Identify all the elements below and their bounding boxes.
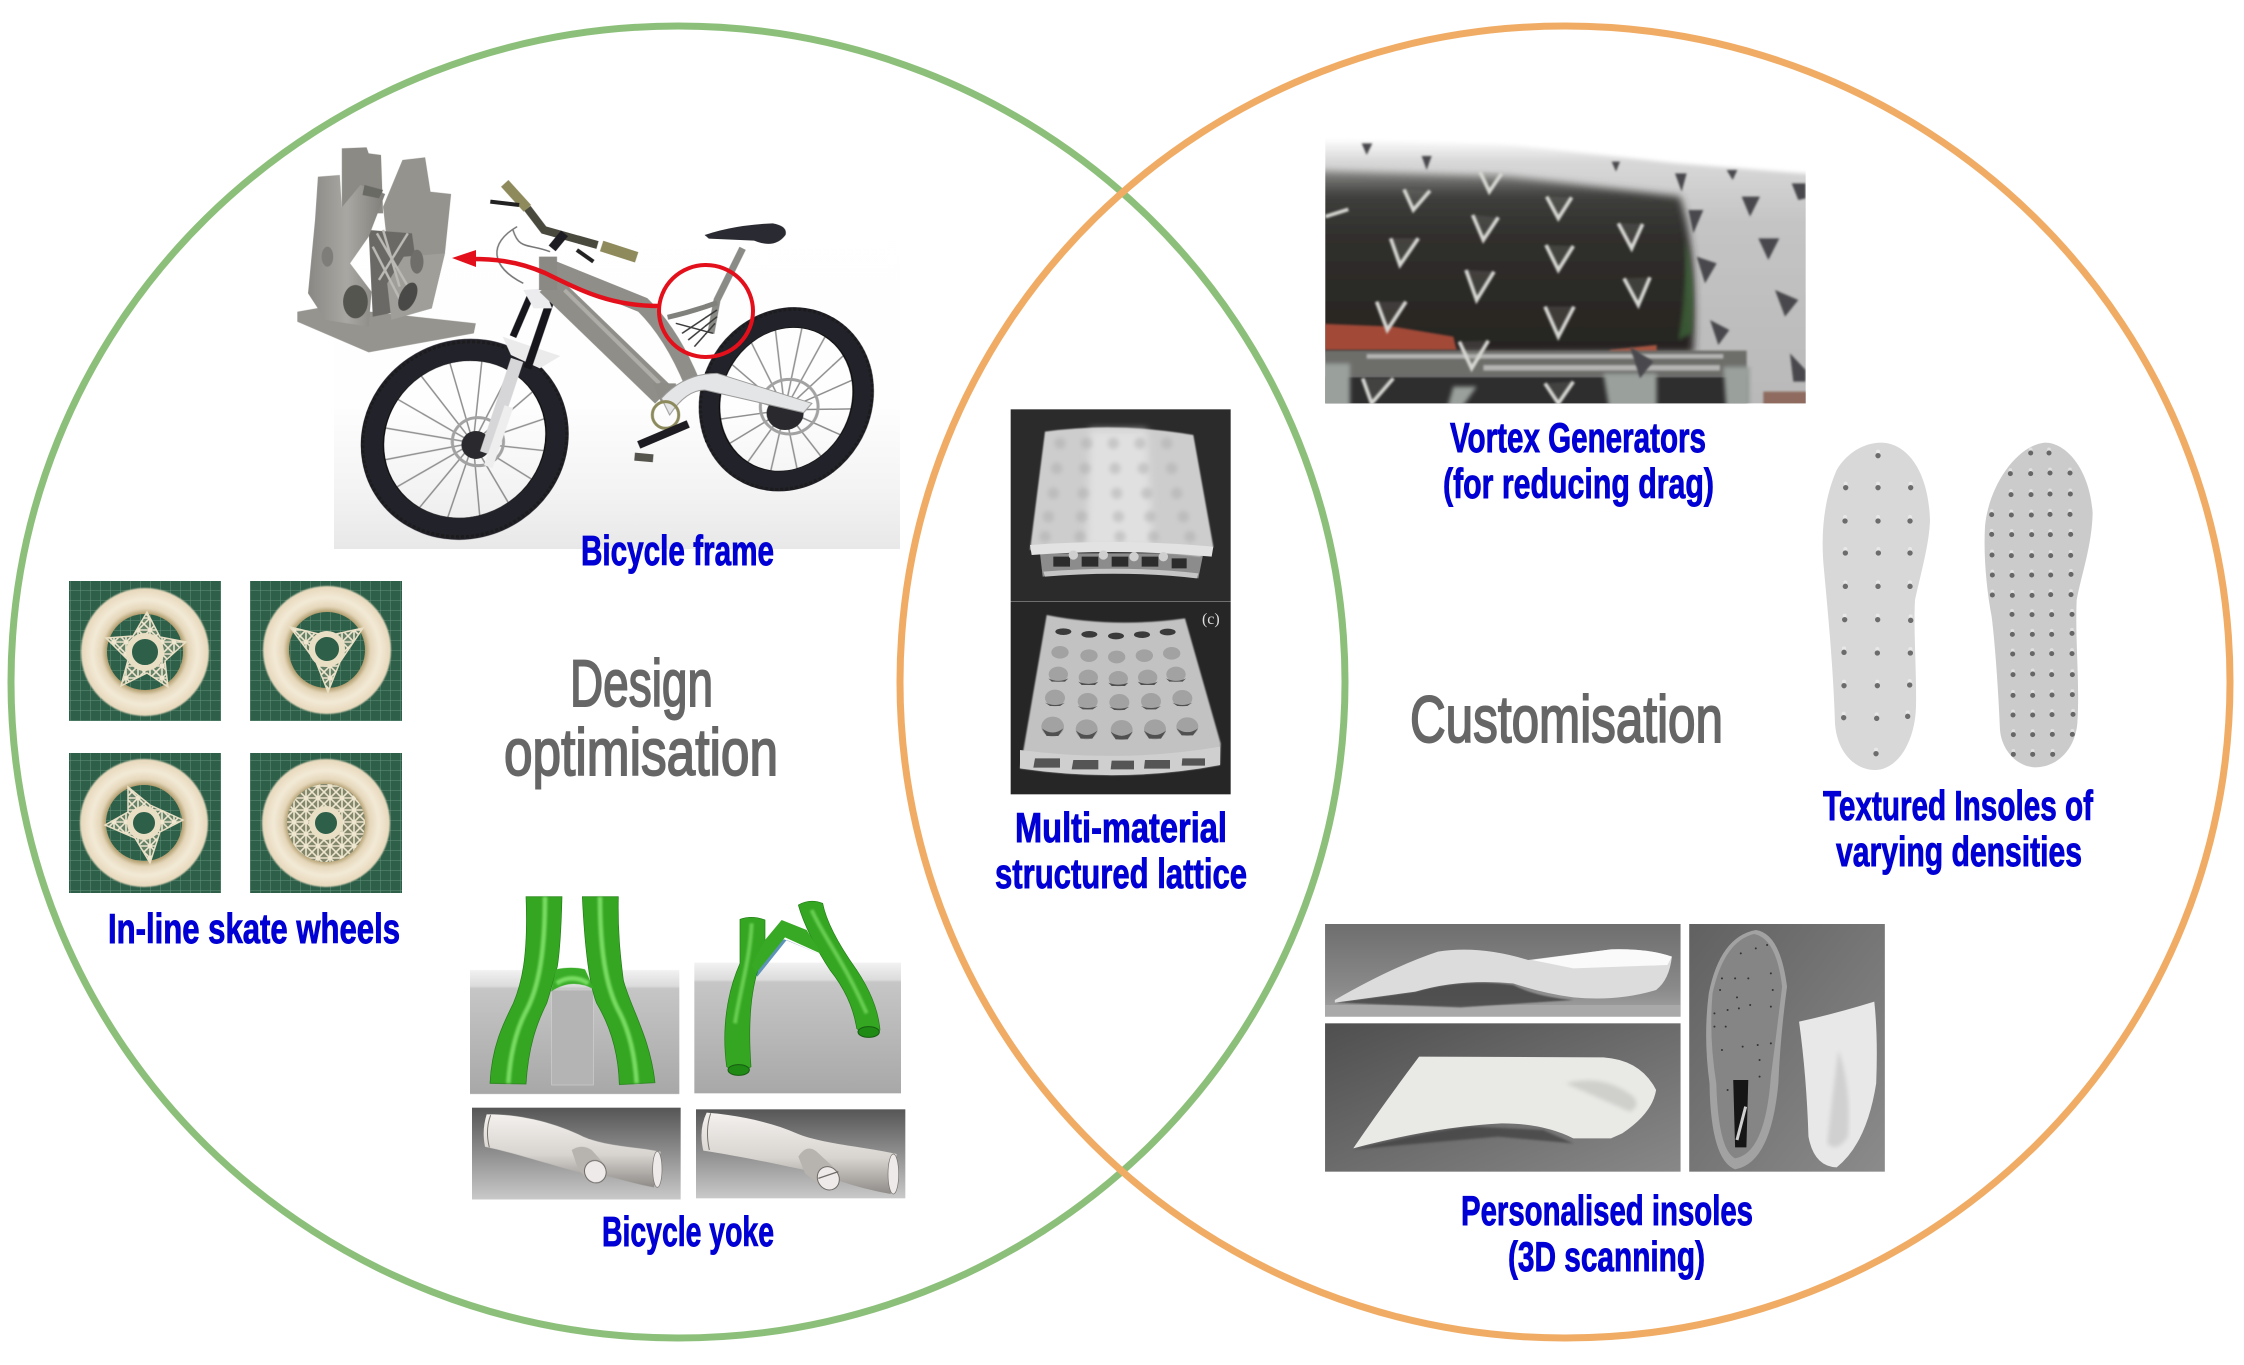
frame: [552, 268, 692, 383]
plate surface texture: [1045, 443, 1190, 537]
front wheel: [344, 329, 586, 550]
panel: bicycle yoke renders: [470, 897, 905, 1199]
panel: in-line skate wheels: [69, 581, 402, 893]
photo background: [334, 170, 900, 549]
label: multi-material structured lattice: [995, 804, 1247, 897]
lattice photo: underside: (c): [1202, 611, 1220, 628]
right circle: customisation: [900, 26, 2230, 1338]
top view photo: [1689, 924, 1885, 1172]
saddle: [705, 223, 786, 244]
swingarm: [661, 373, 812, 415]
label: textured insoles: varying densities: [1836, 828, 2082, 875]
label: bicycle yoke: Bicycle yoke: [602, 1208, 774, 1255]
fork: [486, 360, 517, 453]
label: textured insoles: Textured Insoles of: [1823, 782, 2094, 829]
heading: design optimisation: [504, 646, 778, 789]
heading: design optimisation: optimisation: [504, 715, 778, 789]
dark cylinder: [1297, 170, 1694, 355]
left circle: design optimisation: [11, 26, 1345, 1338]
photo base: [1325, 143, 1806, 404]
label: personalised insoles: Personalised insoles: [1461, 1187, 1753, 1234]
heading: customisation: Customisation: [1410, 682, 1723, 756]
panel: textured insoles: [1823, 443, 2093, 770]
crank and pedal: [652, 402, 679, 428]
3D printed frame part: [297, 147, 476, 352]
dark lower halves of holes: [1042, 678, 1198, 739]
heading: design optimisation: Design: [570, 646, 713, 720]
label: multi-material structured lattice: Multi-material: [1015, 804, 1227, 851]
joint section view 1: [472, 1108, 681, 1199]
wheel 4: full lattice: [250, 753, 402, 893]
joint section view 2: [696, 1109, 905, 1198]
yoke front view: [470, 897, 679, 1094]
side view photo: [1325, 924, 1681, 1017]
label: multi-material structured lattice: structured lattice: [995, 850, 1247, 897]
yoke angled view: [694, 901, 901, 1093]
white V vortex generators: [1325, 172, 1650, 403]
label: vortex generators: (for reducing drag): [1443, 460, 1714, 507]
label: vortex generators: [1443, 414, 1714, 507]
label: personalised insoles: (3D scanning): [1508, 1233, 1705, 1280]
label: vortex generators: Vortex Generators: [1450, 414, 1706, 461]
label: textured insoles: [1823, 782, 2094, 875]
green fringe: [1678, 240, 1693, 340]
red arrow to printed part: [452, 250, 659, 306]
bicycle illustration: [344, 183, 889, 550]
rear wheel: [683, 298, 889, 501]
lattice photo: top view: [1011, 409, 1231, 601]
panel: bicycle frame photo: [297, 147, 900, 550]
label: bicycle frame: Bicycle frame: [581, 527, 774, 574]
angled view photo: [1325, 1023, 1681, 1172]
red and bright bands: [1310, 323, 1457, 350]
label: personalised insoles: [1461, 1187, 1753, 1280]
lattice photo: underside: [1011, 602, 1231, 794]
wheel 1: five spokes: [69, 581, 221, 721]
panel: personalised insole photos: [1325, 924, 1885, 1172]
high density insole: [1985, 443, 2093, 767]
wheel 3: four spokes: [69, 753, 221, 893]
wheel 2: three spokes: [250, 581, 402, 721]
handlebar and grips: [527, 208, 597, 245]
label: in-line skate wheels: In-line skate wheels: [108, 905, 400, 952]
red highlight circle: [659, 265, 753, 357]
dark triangular generators: [1362, 143, 1806, 382]
brake discs: [452, 418, 503, 466]
low density insole: [1823, 443, 1930, 770]
rocker link and lattice: [711, 248, 743, 333]
panel: vortex generators photo: [1325, 141, 1806, 404]
panel: multi-material structured lattice photos: [1011, 409, 1231, 794]
